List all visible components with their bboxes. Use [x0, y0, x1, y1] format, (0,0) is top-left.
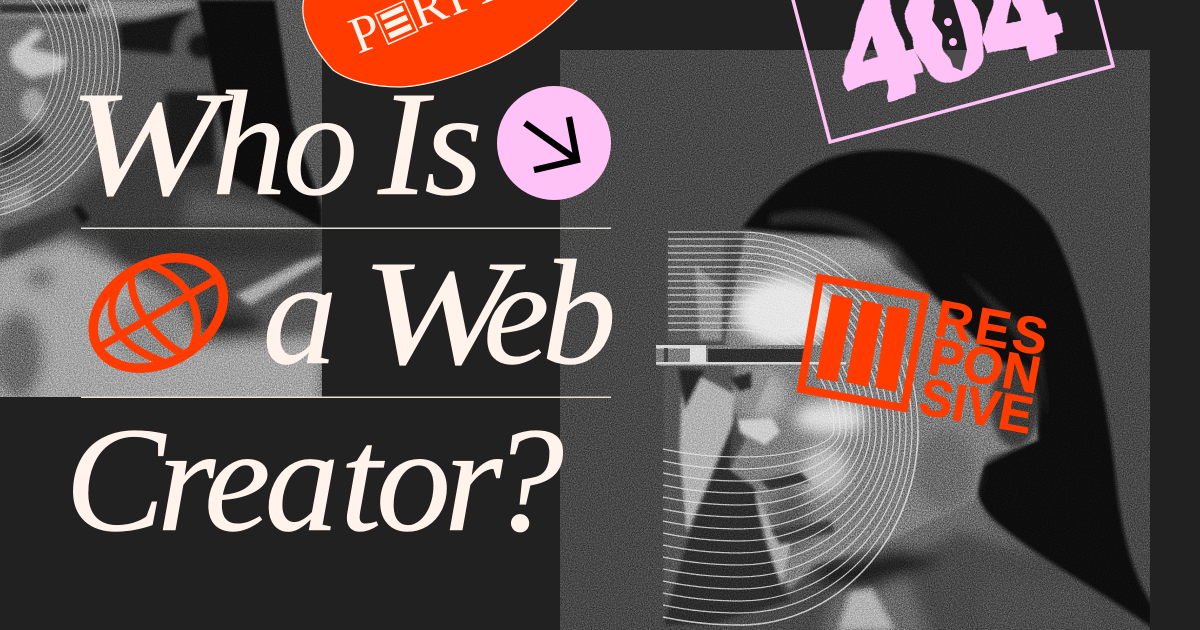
- title line 2: W: [360, 231, 526, 396]
- figure: shoulder highlight: [838, 588, 895, 630]
- figure: neck and shoulder: [810, 457, 1032, 630]
- figure: hair: [742, 150, 1152, 628]
- logo mark: [801, 278, 925, 408]
- badge: 404 pink frame: [792, 0, 1113, 142]
- title: [65, 61, 616, 563]
- divider lines: [81, 228, 611, 398]
- title line 1: ho Is: [212, 61, 483, 227]
- logo text: RES: [931, 290, 1055, 368]
- logo text: SIVE: [915, 368, 1037, 446]
- logo text: PON: [924, 328, 1045, 405]
- title line 3: Creator?: [65, 397, 564, 563]
- icon: orange globe: [73, 235, 243, 391]
- logo: responsive: [801, 278, 1055, 446]
- title line 2: [262, 230, 616, 396]
- left photo panel: visor and neck: [0, 0, 322, 410]
- title line 2: a: [262, 230, 338, 396]
- figure: visor lines upper: [668, 232, 918, 430]
- badge icon: [375, 1, 418, 44]
- logo text: [915, 290, 1055, 446]
- figure: face highlights: [735, 244, 975, 550]
- badge text: P: [342, 2, 389, 65]
- figure: visor rim: [656, 345, 906, 366]
- figure: visor lines lower: [663, 430, 918, 625]
- figure: hair strands: [770, 210, 1048, 420]
- icon: pink circle with arrow: [497, 86, 611, 200]
- badge: orange blob with PERF text: [303, 0, 579, 87]
- figure: ear: [991, 363, 1039, 447]
- title line 1: W: [68, 62, 234, 227]
- 404 zero counter: [932, 0, 967, 71]
- title line 2: eb: [483, 230, 616, 396]
- right photo panel: woman wearing visor: [560, 50, 1152, 630]
- figure: visor reflections: [664, 238, 835, 625]
- figure: face: [725, 232, 1038, 590]
- title line 1: [68, 61, 483, 227]
